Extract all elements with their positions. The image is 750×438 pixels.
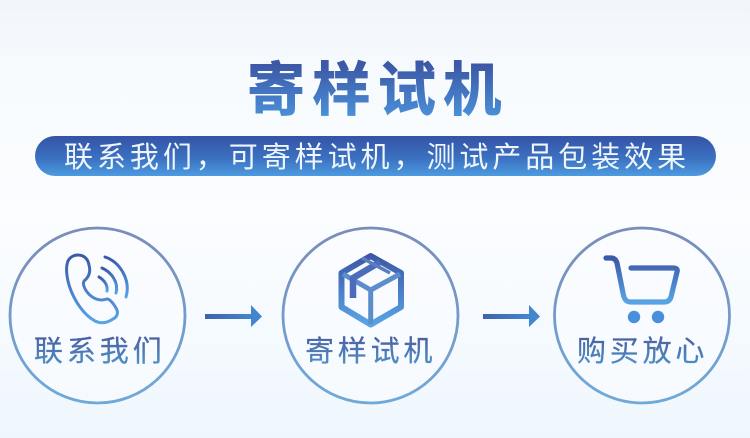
arrow: step 2 to step 3 bbox=[483, 305, 540, 327]
step 3 label: 购买放心 bbox=[577, 335, 708, 368]
step 2 label: 寄样试机 bbox=[305, 335, 436, 368]
step 1: contact us bbox=[10, 228, 185, 403]
step 2: request sample bbox=[283, 228, 458, 403]
step 1 label: 联系我们 bbox=[34, 335, 166, 368]
subtitle banner: 联系我们，可寄样试机，测试产品包装效果 bbox=[64, 141, 690, 174]
icon: phone bbox=[67, 255, 127, 323]
step 2 ring bbox=[283, 228, 458, 403]
icon: box bbox=[342, 256, 401, 324]
title: 寄样试机 bbox=[247, 58, 509, 123]
arrow: step 1 to step 2 bbox=[205, 305, 262, 327]
step 3: buy with confidence bbox=[554, 228, 730, 403]
icon: shopping cart bbox=[606, 258, 677, 323]
step 1 ring bbox=[10, 228, 185, 403]
step 3 ring bbox=[554, 228, 730, 403]
